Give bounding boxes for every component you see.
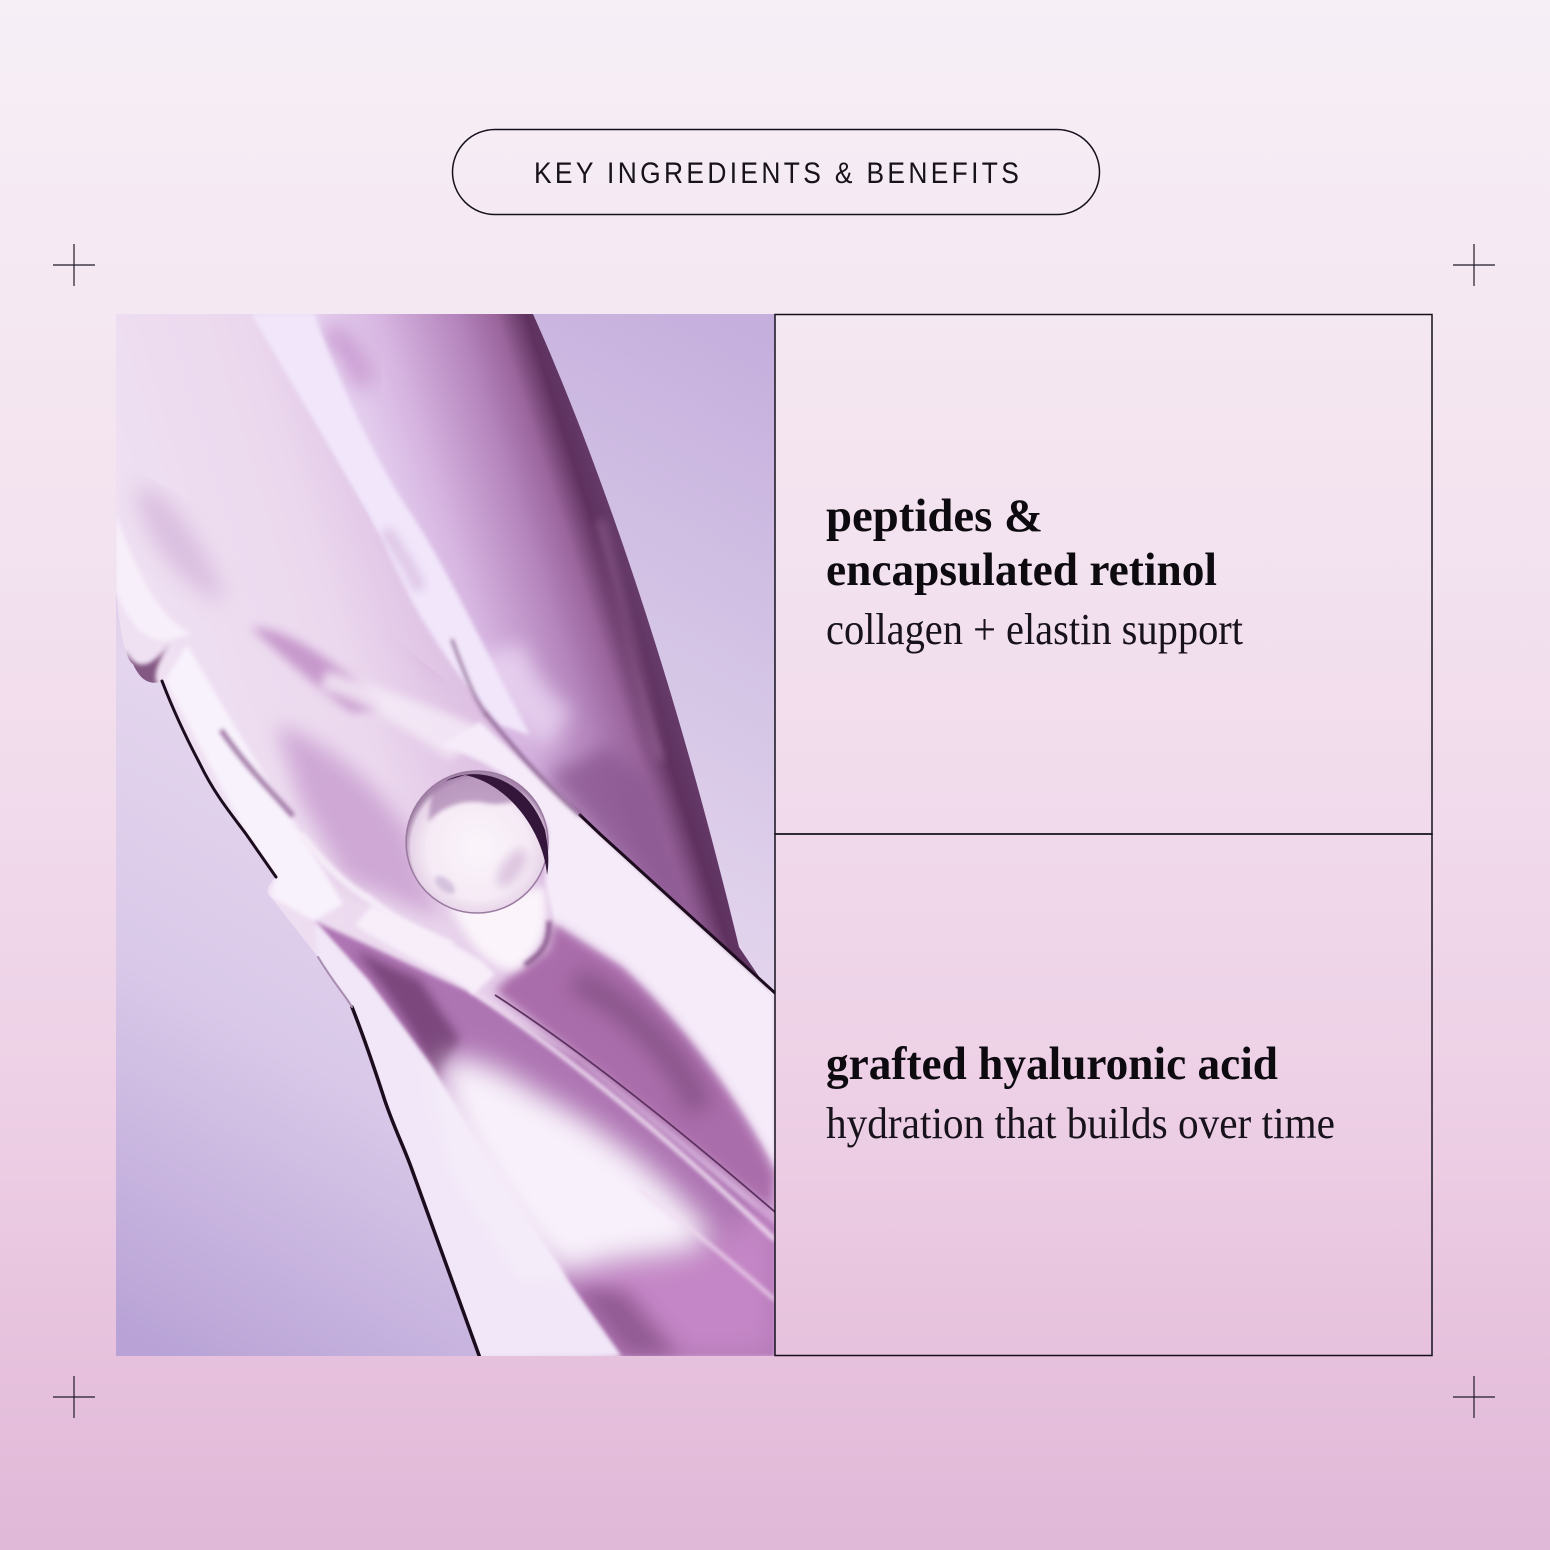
text: collagen support: collagen + elastin support xyxy=(826,605,1243,654)
mid purple region xyxy=(276,724,440,920)
icon: corner cross bottom right xyxy=(1453,1376,1495,1418)
glass rod highlight xyxy=(165,645,343,921)
heading: peptides: peptides & xyxy=(826,490,1043,542)
title pill: KEY INGREDIENTS & BENEFITS xyxy=(534,155,1019,189)
glass curved streak xyxy=(301,834,453,945)
title pill xyxy=(452,130,1100,214)
droplet inner clouds xyxy=(428,777,521,822)
stripe mauve smudge xyxy=(385,530,420,590)
mauve teardrop xyxy=(251,627,385,712)
white highlight stripe xyxy=(251,314,530,735)
glass crease highlight xyxy=(355,905,495,994)
heading: grafted hyaluronic acid: grafted hyaluronic acid xyxy=(826,1038,1278,1090)
icon: corner cross bottom left xyxy=(53,1376,95,1418)
icon: corner cross top left xyxy=(53,244,95,286)
left lobe xyxy=(116,525,188,640)
white core blob xyxy=(440,1058,712,1275)
fine glass streaks xyxy=(470,990,775,1240)
lower right purple xyxy=(570,1200,775,1356)
droplet halo xyxy=(450,885,548,971)
droplet xyxy=(406,771,549,971)
pale sheen xyxy=(320,670,486,760)
photo: glass serum tube with droplet xyxy=(116,314,780,1358)
white lower wall xyxy=(314,921,621,1356)
panel: peptides and retinol xyxy=(775,314,1432,834)
left serum body xyxy=(116,314,775,1356)
upper wall white xyxy=(440,722,775,1170)
heading: encapsulated retinol: encapsulated retinol xyxy=(826,544,1217,596)
upper dark serum band xyxy=(240,314,780,1014)
dark glass outlines xyxy=(162,640,775,1358)
icon: corner cross top right xyxy=(1453,244,1495,286)
body shading xyxy=(116,484,774,1208)
text: hydration: hydration that builds over time xyxy=(826,1099,1335,1148)
lower purple wedge xyxy=(314,905,775,1356)
panel: grafted hyaluronic acid xyxy=(775,834,1432,1356)
